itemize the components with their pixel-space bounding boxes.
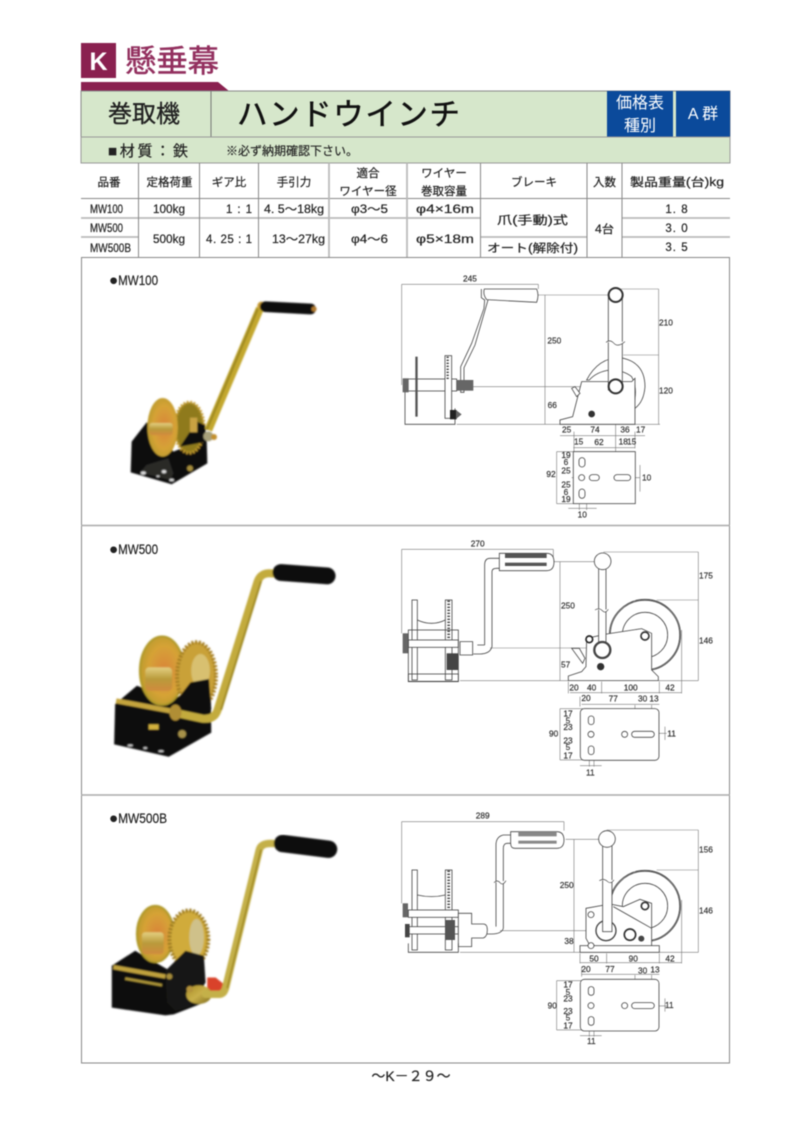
dimension values: 5 — [566, 715, 571, 725]
dimension values: 25 — [561, 480, 571, 490]
dimension values: 11 — [586, 767, 595, 777]
dimension values: 100 — [624, 682, 638, 692]
table body values: MW100 — [90, 204, 123, 216]
dimension values: 66 — [548, 400, 557, 410]
dimension values: 40 — [587, 682, 597, 692]
table header labels: 巻取容量 — [421, 185, 467, 198]
material row — [81, 137, 730, 163]
photo: MW500B winch — [112, 843, 329, 1015]
dimension values: 250 — [560, 880, 574, 890]
dimension values: 13 — [649, 694, 659, 704]
dimension values: 17 — [563, 750, 573, 760]
panel: MW500 label: ●MW500 — [109, 541, 158, 558]
dimension values: 15 — [627, 436, 637, 446]
dimension values: 19 — [561, 450, 571, 460]
table body values: 13～27kg — [272, 234, 325, 246]
header band — [81, 91, 730, 137]
dimension values: 25 — [562, 425, 572, 435]
table header labels: 定格荷重 — [146, 175, 192, 189]
price table type label: 価格表 — [616, 94, 664, 112]
section title: 懸垂幕 — [125, 44, 219, 79]
dimension values: 11 — [587, 1036, 596, 1046]
table body values — [90, 204, 689, 255]
table body values: MW500B — [90, 243, 131, 255]
table header labels: 品番 — [98, 176, 121, 189]
dimension values: 62 — [594, 437, 604, 447]
front view — [560, 288, 645, 424]
dimension values: 42 — [665, 682, 675, 692]
panel: MW500B label: ●MW500B — [109, 810, 167, 827]
panel frame — [81, 258, 730, 1063]
table header labels: ワイヤー — [421, 168, 467, 180]
dimension values: 146 — [699, 635, 713, 645]
dimension values: 175 — [699, 571, 713, 581]
table body values: 4. 5～18kg — [264, 204, 324, 216]
price group label: A 群 — [688, 105, 718, 123]
dimension values: 77 — [605, 964, 615, 974]
table body values: 4. 25 : 1 — [206, 234, 252, 246]
table body values: φ4～6 — [351, 234, 388, 246]
table body values: 100kg — [153, 204, 185, 216]
photo: MW500 winch — [114, 573, 327, 757]
table body values: 1 : 1 — [226, 204, 252, 216]
dimension values: 30 — [638, 694, 648, 704]
dimension values: 11 — [667, 729, 676, 739]
dimension values: 15 — [574, 436, 584, 446]
dimension values: 17 — [563, 708, 573, 718]
dimension lines — [402, 284, 660, 510]
dimension values: 30 — [638, 965, 648, 975]
table header labels — [98, 166, 724, 198]
side view — [403, 832, 564, 952]
dimension values: 19 — [561, 494, 571, 504]
base plate — [580, 979, 659, 1031]
dimension values: 10 — [578, 510, 587, 520]
dimension values: 6 — [564, 457, 569, 467]
dimension values: 17 — [563, 1021, 573, 1031]
dimension values: 20 — [581, 964, 591, 974]
dimension values: 23 — [563, 993, 573, 1003]
dimension values: 5 — [566, 987, 571, 997]
material row: ※必ず納期確認下さい。 — [226, 143, 358, 158]
dimension values — [463, 274, 673, 520]
dimension values: 250 — [547, 336, 562, 346]
price group label — [676, 91, 730, 137]
dimension values: 18 — [619, 436, 628, 446]
dimension values: 120 — [659, 385, 673, 395]
product title: ハンドウインチ — [237, 98, 460, 132]
dimension values: 210 — [659, 317, 673, 327]
technical drawing: MW500B — [402, 810, 713, 1046]
dimension values: 5 — [566, 1013, 571, 1023]
dimension values: 90 — [549, 729, 559, 739]
dimension values: 25 — [561, 465, 571, 475]
table body values: オート(解除付) — [487, 241, 578, 255]
table body values: 1. 8 — [665, 204, 689, 216]
dimension values: 23 — [563, 722, 573, 732]
dimension values: 6 — [564, 487, 569, 497]
dimension values: 10 — [642, 472, 652, 482]
dimension values: 156 — [699, 845, 713, 855]
table header labels: ブレーキ — [511, 175, 557, 189]
base plate — [573, 452, 635, 504]
table body values: 3. 0 — [665, 223, 689, 235]
side view — [403, 553, 554, 682]
price table type label — [607, 91, 673, 137]
dimension values: 245 — [463, 274, 477, 284]
table body values: MW500 — [90, 223, 123, 235]
spec table — [81, 163, 730, 258]
table grid — [81, 163, 730, 258]
dimension values: 90 — [629, 953, 638, 963]
dimension values: 90 — [548, 1000, 557, 1010]
dimension values — [476, 810, 713, 1046]
maroon tab — [81, 82, 229, 91]
front view — [580, 831, 681, 952]
dimension values: 23 — [563, 735, 573, 745]
page number: ～K－２９～ — [371, 1068, 451, 1084]
technical drawing: MW100 — [402, 274, 673, 520]
price table type label: 種別 — [624, 117, 656, 135]
dimension values: 270 — [471, 538, 485, 548]
table body values: φ3～5 — [351, 204, 388, 216]
section badge K — [81, 43, 116, 78]
front view — [568, 553, 681, 681]
panel: MW100 label: ●MW100 — [109, 272, 158, 289]
table header labels: 手引力 — [277, 175, 311, 189]
dimension values: 17 — [636, 425, 646, 435]
photo: MW100 winch — [131, 302, 317, 484]
dimension values: 92 — [546, 469, 556, 479]
table header labels: ギア比 — [212, 176, 247, 189]
section badge K: K — [89, 48, 108, 76]
dimension values: 11 — [665, 1000, 674, 1010]
dimension values: 20 — [581, 693, 591, 703]
dimension values: 74 — [590, 425, 600, 435]
dimension lines — [402, 549, 698, 767]
dimension values: 36 — [620, 425, 630, 435]
table body values: 500kg — [153, 234, 185, 246]
table body values: 4台 — [595, 222, 614, 236]
dimension values: 57 — [561, 660, 571, 670]
dimension lines — [402, 822, 698, 1037]
dimension values: 146 — [699, 905, 713, 915]
table body values: φ5×18m — [416, 234, 474, 246]
dimension values: 17 — [563, 979, 573, 989]
dimension values: 23 — [563, 1006, 573, 1016]
dimension values — [471, 538, 713, 777]
dimension values: 250 — [561, 601, 575, 611]
category name: 巻取機 — [108, 101, 180, 128]
dimension values: 20 — [569, 682, 579, 692]
dimension values: 50 — [589, 953, 599, 963]
table header labels: 適合 — [356, 166, 380, 180]
table body values: 3. 5 — [665, 242, 689, 254]
dimension values: 77 — [609, 694, 618, 704]
side view — [403, 289, 538, 424]
material row: ■材質：鉄 — [108, 142, 188, 160]
table header labels: ワイヤー径 — [339, 185, 397, 198]
table body values: 爪(手動)式 — [497, 213, 569, 227]
table header labels: 製品重量(台)kg — [630, 175, 724, 189]
table body values: φ4×16m — [416, 204, 474, 216]
dimension values: 289 — [476, 810, 490, 820]
dimension values: 13 — [650, 965, 660, 975]
base plate — [580, 709, 659, 760]
dimension values: 38 — [564, 936, 574, 946]
technical drawing: MW500 — [402, 538, 713, 777]
dimension values: 42 — [665, 953, 675, 963]
table header labels: 入数 — [593, 176, 616, 189]
dimension values: 5 — [566, 742, 571, 752]
